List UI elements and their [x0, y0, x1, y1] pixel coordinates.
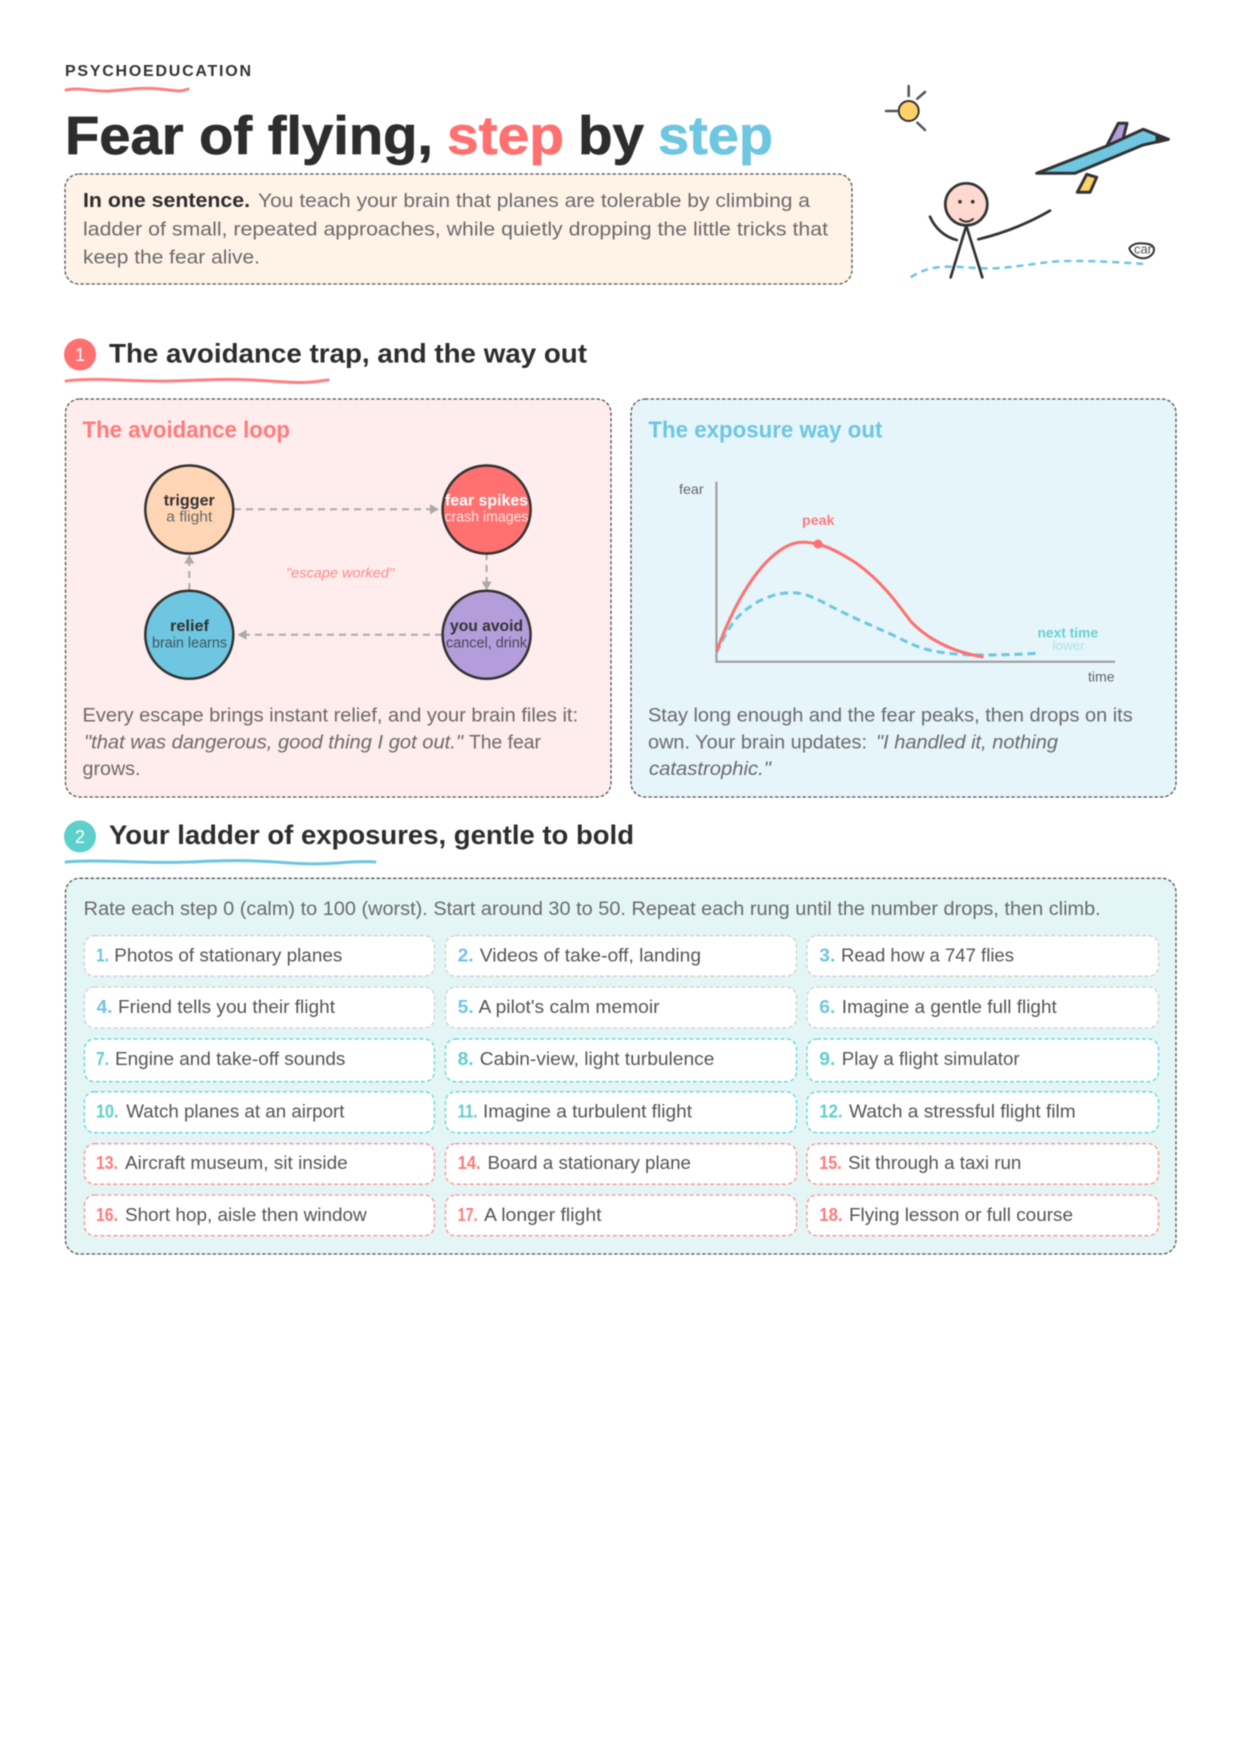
title: [65, 106, 773, 166]
panel body text: Stay long enough and the fear peaks, then drops on its: [648, 706, 1133, 727]
peak marker: [814, 540, 822, 548]
panel body text: [82, 706, 578, 780]
node: trigger: trigger: [164, 493, 215, 510]
flight path dashed line: [911, 261, 1145, 277]
rung 10: [84, 1092, 434, 1133]
rung 1: 1.: [96, 946, 109, 966]
rung 18: Flying lesson or full course: [849, 1205, 1073, 1225]
panel body text: Every escape brings instant relief, and your brain files it:: [82, 706, 578, 727]
rung 15: [807, 1144, 1158, 1184]
rung 17: A longer flight: [484, 1205, 602, 1225]
rung 7: [84, 1039, 434, 1082]
node: trigger: [145, 466, 233, 554]
lower label: lower: [1053, 638, 1085, 653]
curve: next time: [716, 593, 1036, 655]
rung 9: [807, 1039, 1158, 1082]
rung 3: Read how a 747 flies: [841, 946, 1014, 966]
rung 14: 14.: [458, 1153, 481, 1173]
title: step: [658, 106, 773, 166]
callout: in one sentence: [65, 174, 852, 284]
rung 15: 15.: [819, 1153, 842, 1173]
rung 16: Short hop, aisle then window: [125, 1205, 368, 1225]
rung 13: Aircraft museum, sit inside: [125, 1153, 348, 1173]
rung 5: [446, 987, 796, 1028]
node: you avoid: you avoid: [450, 618, 523, 635]
rung 14: Board a stationary plane: [488, 1153, 691, 1173]
node: fear spikes: crash images: [444, 510, 528, 526]
rung 11: 11.: [458, 1102, 478, 1122]
rung 13: 13.: [96, 1153, 118, 1173]
curve: first exposure: [716, 542, 984, 657]
rung 6: Imagine a gentle full flight: [842, 997, 1057, 1017]
panel body text: own. Your brain updates:: [648, 732, 867, 753]
rung 1: Photos of stationary planes: [114, 946, 342, 966]
node: fear spikes: fear spikes: [445, 493, 528, 510]
node: relief: brain learns: [152, 635, 227, 651]
panel heading: The avoidance loop: [82, 417, 290, 443]
panel body text: The fear: [469, 732, 542, 753]
arrow: fear spikes to avoid: [482, 553, 492, 590]
icon: car: car: [1134, 242, 1152, 256]
rung 18: [807, 1195, 1158, 1236]
panel: the exposure way out: [631, 399, 1176, 797]
rung 8: 8.: [458, 1049, 474, 1069]
rung 6: [807, 987, 1158, 1028]
panel: the avoidance loop: [66, 399, 611, 797]
rung 16: [84, 1195, 434, 1236]
panel: exposure ladder: [66, 878, 1176, 1254]
rung 17: 17.: [458, 1205, 478, 1225]
axes: [716, 482, 1115, 662]
rung 8: Cabin-view, light turbulence: [480, 1049, 714, 1069]
rung 9: 9.: [819, 1049, 835, 1069]
section heading 2: [64, 820, 634, 864]
rung 11: Imagine a turbulent flight: [483, 1102, 692, 1122]
rung 12: Watch a stressful flight film: [849, 1102, 1076, 1122]
section heading 1: The avoidance trap, and the way out: [109, 338, 587, 368]
panel body text: "that was dangerous, good thing I got out.": [84, 732, 464, 753]
icon: sun: [886, 86, 925, 130]
rung 3: 3.: [819, 946, 835, 966]
rung 14: [446, 1144, 796, 1184]
node: you avoid: cancel, drink: [446, 635, 528, 651]
panel body text: catastrophic.": [649, 759, 772, 780]
panel heading: The exposure way out: [648, 417, 883, 443]
node: fear spikes: [443, 466, 531, 554]
icon: stick figure: [930, 183, 1050, 277]
section heading 1: [64, 338, 587, 383]
loop centre note: "escape worked": [286, 565, 395, 581]
arrow: relief to trigger: [184, 554, 194, 590]
rung 1: [84, 936, 434, 976]
illustration: person watching a plane: [886, 86, 1168, 277]
rung 3: [807, 936, 1158, 976]
rung 2: Videos of take-off, landing: [480, 946, 701, 966]
panel body text: [648, 706, 1133, 780]
icon: car: [1129, 242, 1154, 258]
next time label: next time: [1038, 626, 1098, 641]
ladder instructions: Rate each step 0 (calm) to 100 (worst). Start around 30 to 50. Repeat each rung until the number drops, then climb.: [84, 899, 1101, 920]
callout: in one sentence: keep the fear alive.: [83, 246, 260, 268]
title: step: [447, 106, 564, 166]
section heading 1: 1: [75, 345, 85, 365]
rung 15: Sit through a taxi run: [848, 1153, 1021, 1173]
rung 7: 7.: [96, 1049, 109, 1069]
rung 18: 18.: [819, 1205, 842, 1225]
line chart: fear over time: [679, 481, 1115, 685]
rung 8: [446, 1039, 796, 1082]
rung 7: Engine and take-off sounds: [115, 1049, 345, 1069]
rung 4: [84, 987, 434, 1028]
rung 13: [84, 1144, 434, 1184]
callout: in one sentence: ladder of small, repeated approaches, while quietly dropping the little tricks that: [83, 218, 829, 240]
rung 2: [446, 936, 796, 976]
rung 12: [807, 1092, 1158, 1133]
callout: in one sentence: You teach your brain that planes are tolerable by climbing a: [258, 190, 810, 212]
rung 5: A pilot's calm memoir: [478, 997, 660, 1017]
rung 9: Play a flight simulator: [842, 1049, 1020, 1069]
rung 5: 5.: [458, 997, 474, 1017]
node: relief: [145, 591, 233, 679]
section heading 2: Your ladder of exposures, gentle to bold: [109, 820, 634, 850]
rung 4: Friend tells you their flight: [118, 997, 335, 1017]
node: you avoid: [443, 591, 531, 679]
panel body text: "I handled it, nothing: [876, 732, 1058, 753]
title: by: [578, 106, 644, 166]
rung 2: 2.: [458, 946, 474, 966]
rung 10: 10.: [96, 1102, 118, 1122]
rung 17: [446, 1195, 796, 1236]
title: Fear of flying,: [65, 106, 433, 166]
icon: plane: [1037, 123, 1168, 192]
loop diagram: [145, 466, 531, 679]
rung 12: 12.: [819, 1102, 842, 1122]
axis label: fear: fear: [679, 481, 704, 497]
eyebrow label: PSYCHOEDUCATION: [65, 63, 251, 80]
rung 16: 16.: [96, 1205, 118, 1225]
rung 4: 4.: [96, 997, 112, 1017]
section heading 2: 2: [75, 827, 85, 847]
node: relief: relief: [170, 618, 210, 635]
peak label: peak: [802, 513, 835, 528]
rung 6: 6.: [819, 997, 835, 1017]
axis label: time: time: [1088, 669, 1115, 685]
callout: in one sentence: In one sentence.: [83, 190, 250, 212]
arrow: avoid to relief: [238, 630, 442, 640]
arrow: trigger to fear spikes: [234, 504, 439, 514]
panel body text: grows.: [82, 759, 140, 780]
rung 10: Watch planes at an airport: [126, 1102, 344, 1122]
node: trigger: a flight: [166, 510, 212, 526]
rung 11: [446, 1092, 796, 1133]
